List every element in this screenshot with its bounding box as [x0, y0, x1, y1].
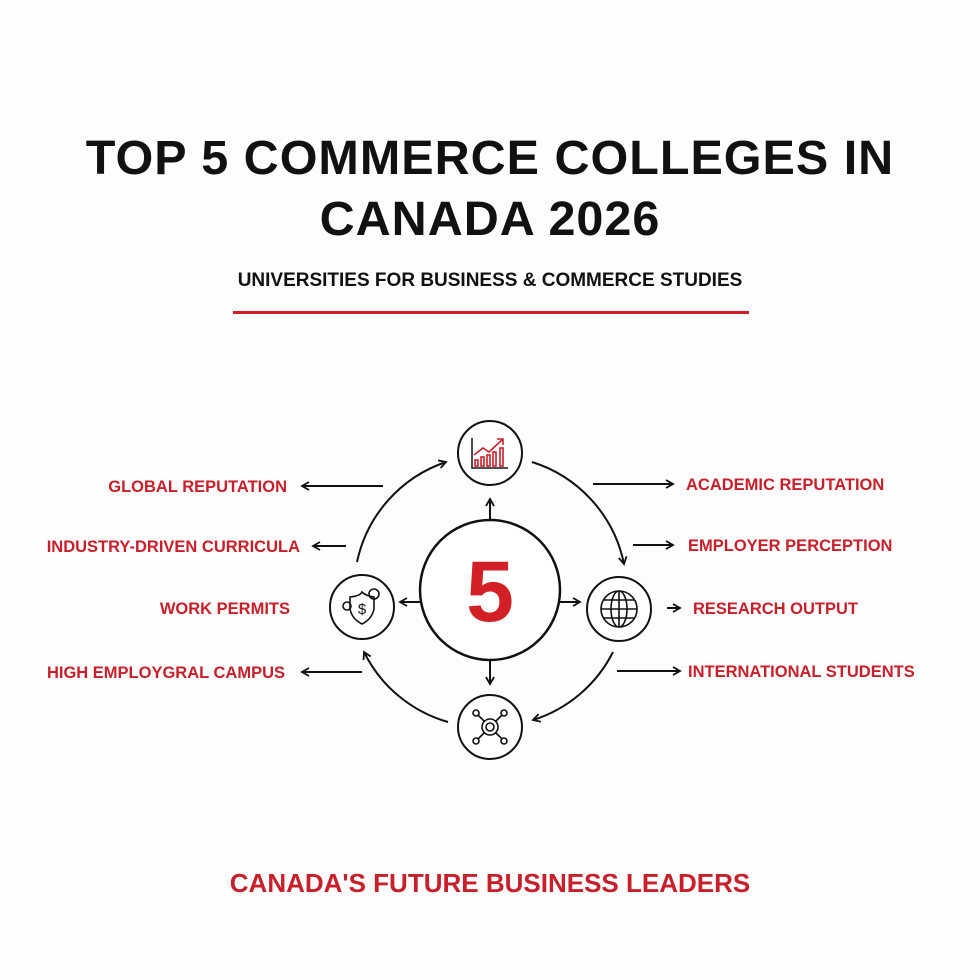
icon: shield with dollar: $ — [358, 601, 367, 618]
icon: shield with dollar — [330, 575, 394, 639]
icon: chart — [458, 421, 522, 485]
title: CANADA 2026 — [320, 192, 660, 246]
title: TOP 5 COMMERCE COLLEGES IN — [86, 131, 894, 185]
arrow: right to bottom — [533, 652, 613, 720]
labels: GLOBAL REPUTATION — [108, 478, 287, 496]
labels: EMPLOYER PERCEPTION — [688, 537, 892, 555]
labels: ACADEMIC REPUTATION — [686, 476, 884, 494]
labels — [47, 476, 915, 682]
center arrows — [400, 499, 580, 684]
labels: INDUSTRY-DRIVEN CURRICULA — [47, 538, 300, 556]
red divider — [233, 311, 749, 314]
labels: RESEARCH OUTPUT — [693, 600, 858, 618]
arrow: bottom to left — [364, 652, 448, 722]
arrow: top to right — [532, 462, 624, 564]
center circle with 5 — [420, 520, 560, 660]
title — [86, 131, 894, 246]
arrow: left to top — [357, 462, 446, 562]
footer tagline: CANADA'S FUTURE BUSINESS LEADERS — [230, 868, 750, 898]
icon: globe — [587, 577, 651, 641]
labels: INTERNATIONAL STUDENTS — [688, 663, 915, 681]
icon: network — [458, 695, 522, 759]
side arrows — [302, 484, 680, 672]
labels: WORK PERMITS — [160, 600, 290, 618]
subtitle: UNIVERSITIES FOR BUSINESS & COMMERCE STUDIES — [238, 270, 742, 291]
center circle with 5: 5 — [466, 544, 514, 640]
labels: HIGH EMPLOYGRAL CAMPUS — [47, 664, 285, 682]
